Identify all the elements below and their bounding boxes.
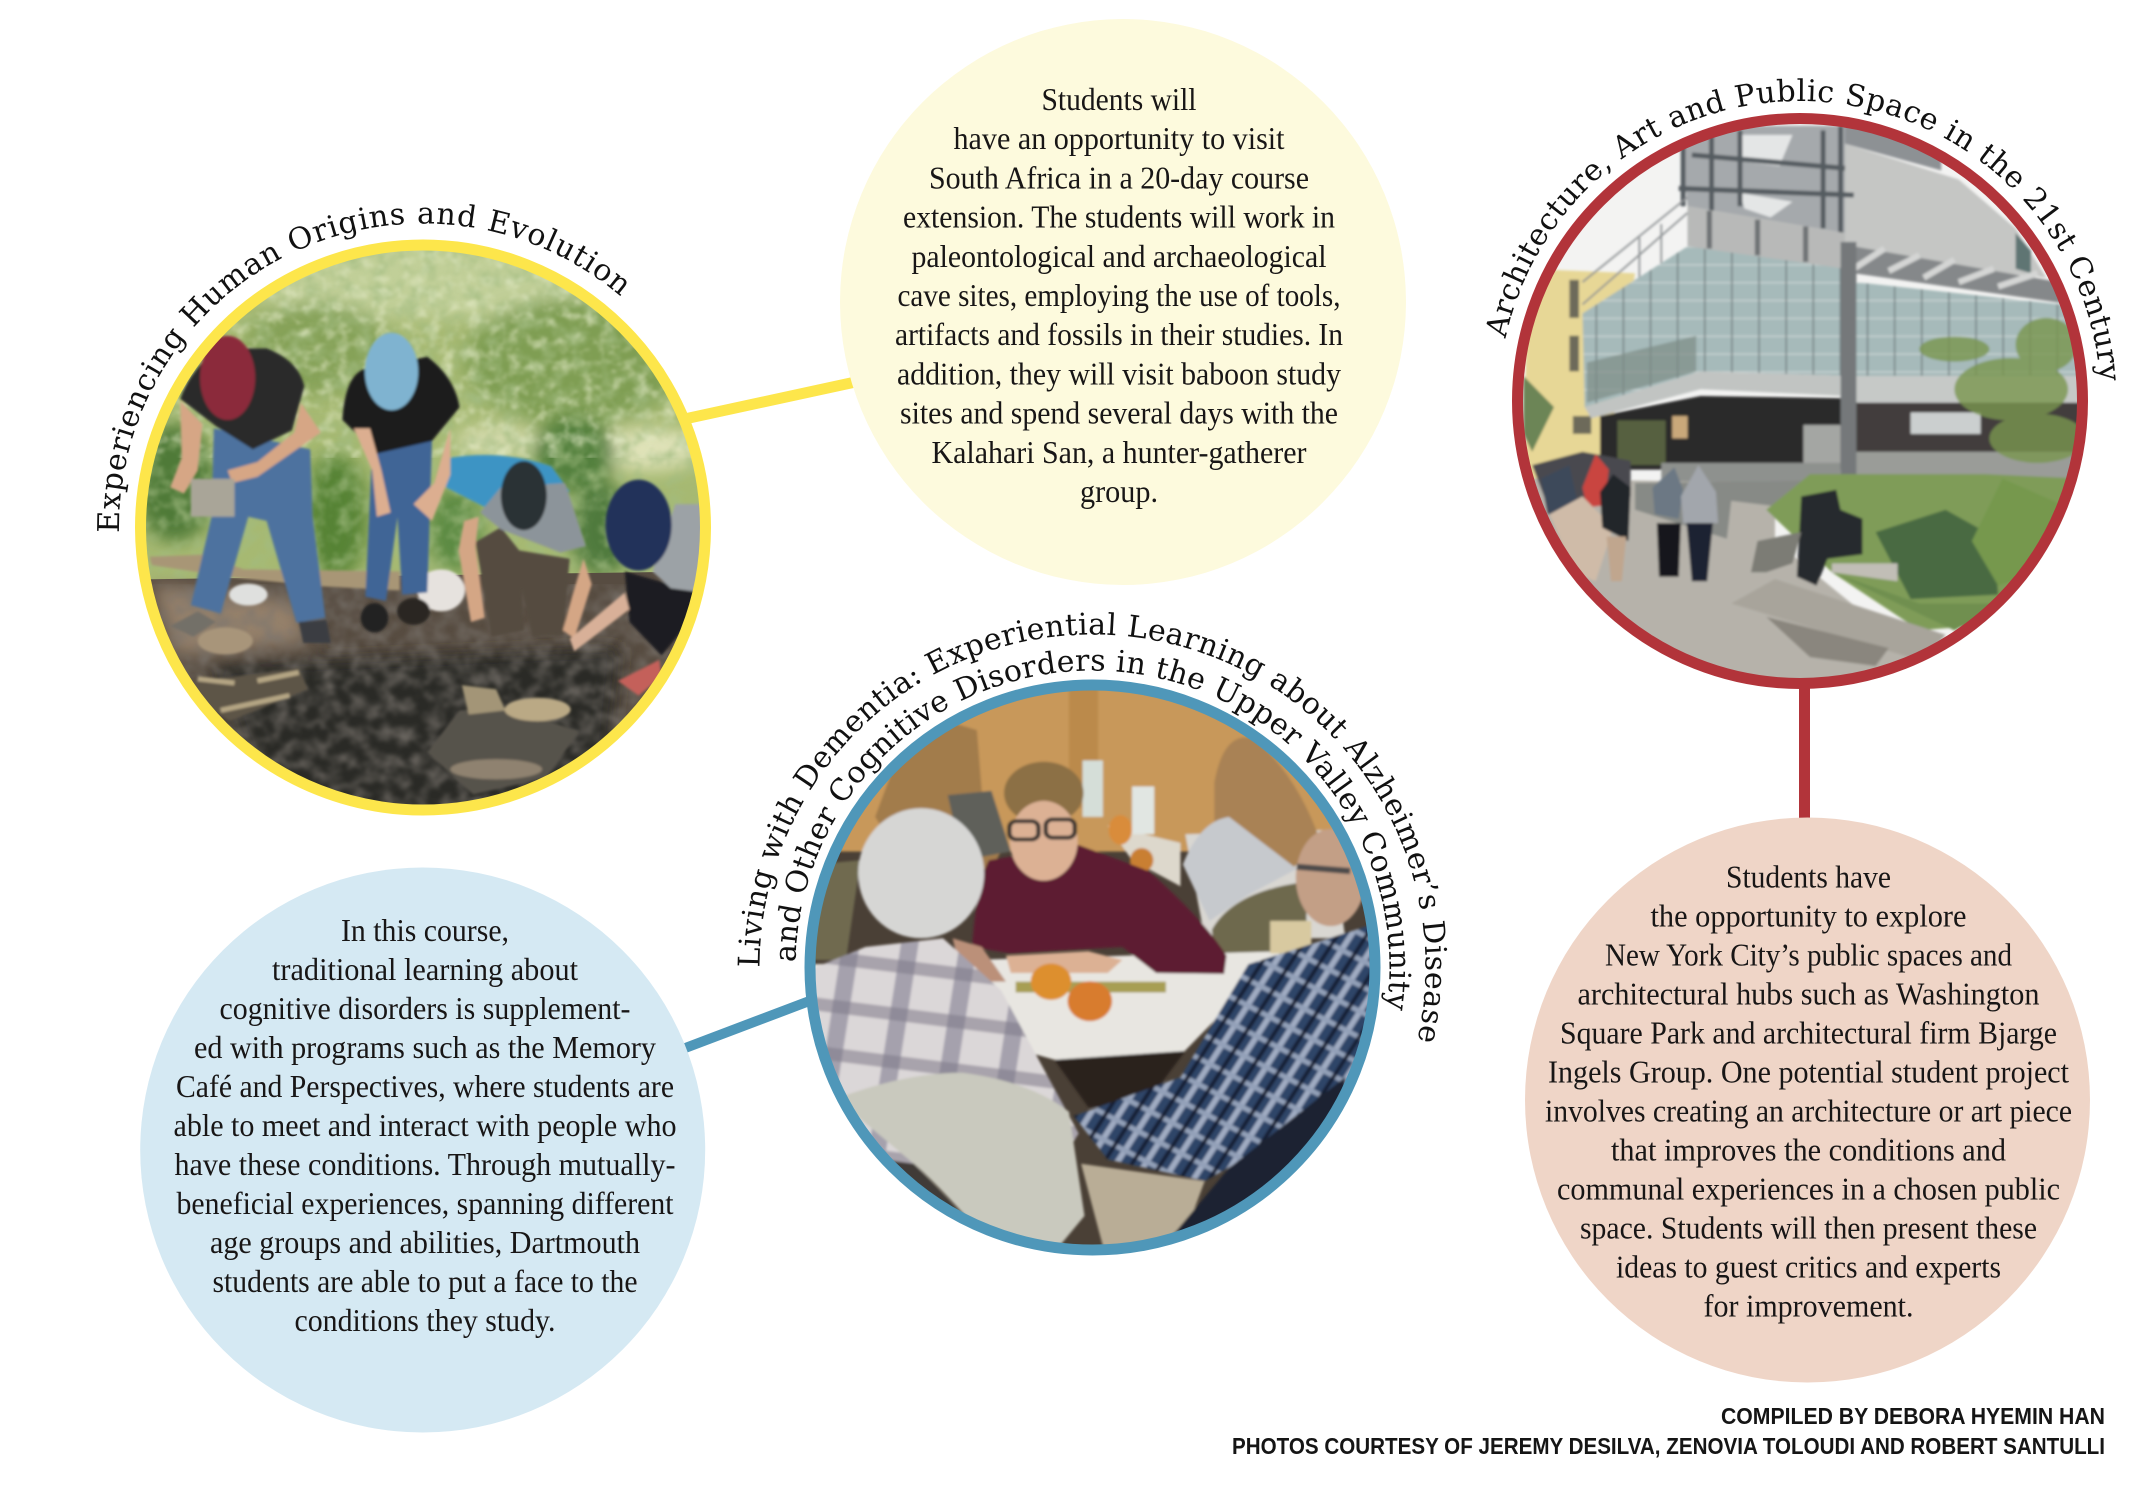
text block: South Africa description: addition, they will visit baboon study — [897, 355, 1341, 391]
text block: South Africa description: artifacts and fossils in their studies. In — [895, 316, 1343, 352]
text block: dementia description: In this course, — [341, 912, 509, 948]
credits — [1232, 1403, 2105, 1459]
person 1 — [191, 428, 325, 623]
connector: blue line — [680, 1000, 812, 1050]
text block: South Africa description: group. — [1080, 473, 1158, 509]
heading: Living with Dementia, second line: and Other Cognitive Disorders in the Upper Valley Community — [778, 650, 1412, 1011]
text block: architecture description — [1545, 859, 2072, 1324]
ring: red border — [1518, 118, 2082, 684]
text block: architecture description: space. Students will then present these — [1580, 1210, 2037, 1246]
text block: dementia description: students are able to put a face to the — [212, 1263, 638, 1299]
text block: architecture description: Square Park and architectural firm Bjarge — [1560, 1015, 2057, 1051]
text block: dementia description: ed with programs such as the Memory — [194, 1029, 656, 1065]
walkers — [1532, 452, 1631, 505]
connector: yellow line — [680, 381, 860, 420]
text block: South Africa description: extension. The students will work in — [903, 199, 1335, 235]
text block: dementia description: Café and Perspectives, where students are — [176, 1068, 674, 1104]
seated people — [1797, 490, 1862, 586]
heading: Living with Dementia, first line: Living with Dementia: Experiential Learning about Alzheimer’s Disease — [738, 612, 1448, 1042]
text block: architecture description: ideas to guest critics and experts — [1616, 1249, 2001, 1285]
text block: dementia description: cognitive disorders is supplement- — [220, 990, 630, 1026]
ring: yellow border — [140, 245, 706, 810]
text block: South Africa description: sites and spend several days with the — [900, 395, 1338, 431]
photo circle: students with community members at table — [804, 680, 1380, 1256]
text block: architecture description: Ingels Group. One potential student project — [1548, 1054, 2069, 1090]
person 3 — [476, 527, 570, 637]
text block: architecture description: the opportunity to explore — [1650, 898, 1966, 934]
text block: South Africa description: South Africa in a 20-day course — [929, 159, 1309, 195]
person 2 — [365, 441, 432, 601]
text block: architecture description: communal experiences in a chosen public — [1557, 1171, 2060, 1207]
heading: Experiencing Human Origins and Evolution: Experiencing Human Origins and Evolution — [97, 204, 626, 532]
panel: dementia course description — [140, 868, 705, 1432]
text block: dementia description: traditional learning about — [272, 951, 578, 987]
text block: South Africa description: Students will — [1042, 81, 1197, 117]
text block: South Africa description: Kalahari San, a hunter-gatherer — [932, 434, 1307, 470]
photo circle: students excavating outdoors — [135, 240, 711, 816]
text block: dementia description: beneficial experiences, spanning different — [176, 1185, 674, 1221]
text block: architecture description: that improves the conditions and — [1611, 1132, 2006, 1168]
text block: architecture description: Students have — [1726, 859, 1891, 895]
text block: South Africa description: cave sites, employing the use of tools, — [898, 277, 1340, 313]
credits: COMPILED BY DEBORA HYEMIN HAN — [1721, 1403, 2105, 1429]
panel: South Africa course description — [840, 19, 1406, 585]
text block: architecture description: New York City’s public spaces and — [1605, 937, 2012, 973]
text block: dementia description — [174, 912, 676, 1338]
text block: architecture description: architectural hubs such as Washington — [1578, 976, 2040, 1012]
text block: South Africa description — [895, 81, 1343, 509]
text block: South Africa description: paleontological and archaeological — [912, 238, 1327, 274]
connector: red line — [1799, 680, 1810, 830]
person 4 — [625, 571, 698, 656]
text block: dementia description: have these conditions. Through mutually- — [174, 1146, 676, 1182]
text block: dementia description: able to meet and interact with people who — [174, 1107, 676, 1143]
ring: blue border — [810, 685, 1375, 1250]
text block: dementia description: age groups and abilities, Dartmouth — [210, 1224, 640, 1260]
text block: architecture description: for improvement. — [1704, 1288, 1914, 1324]
text block: architecture description: involves creating an architecture or art piece — [1545, 1093, 2072, 1129]
heading: Architecture, Art and Public Space in the 21st Century: Architecture, Art and Public Space in the 21st Century — [1486, 78, 2116, 380]
photo circle: building and public walkway — [1512, 113, 2088, 689]
panel: architecture course description — [1525, 818, 2090, 1382]
text block: dementia description: conditions they study. — [294, 1302, 556, 1338]
text block: South Africa description: have an opportunity to visit — [954, 120, 1285, 156]
